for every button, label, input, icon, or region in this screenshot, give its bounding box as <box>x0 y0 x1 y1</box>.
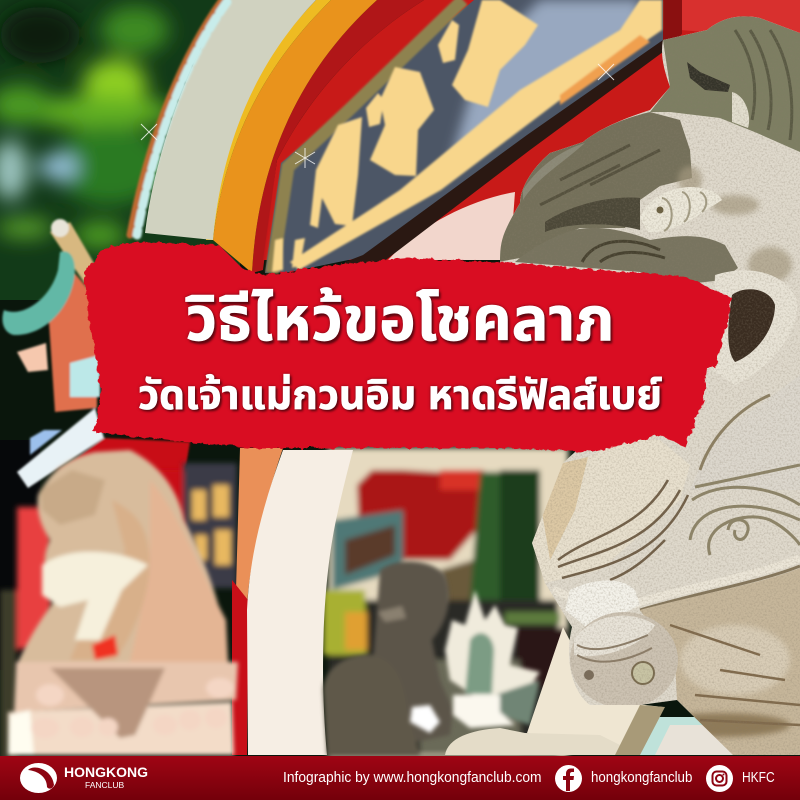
lion lip <box>515 228 738 285</box>
subtitle: วัดเจ้าแม่กวนอิม หาดรีฟัลส์เบย์ <box>138 372 662 418</box>
lion collar band <box>553 558 800 607</box>
lion tooth <box>732 92 749 128</box>
lion neck and shoulder <box>690 375 800 490</box>
lion shoulder fur <box>532 440 690 583</box>
logo wordmark: HONGKONG <box>64 764 148 780</box>
lion lower body <box>640 568 800 760</box>
lion upper nostril <box>687 62 730 92</box>
lion stone base <box>500 16 800 717</box>
lion mouth rim <box>712 270 797 385</box>
instagram handle: HKFC <box>742 769 775 786</box>
ornament strip on arch edge <box>130 0 227 235</box>
lion snout top <box>565 581 640 630</box>
chest scroll pattern <box>690 465 800 555</box>
logo: Hong Kong Fanclub: FANCLUB <box>85 780 124 790</box>
plaque gold characters <box>272 0 662 272</box>
gold-lettered plaque <box>141 0 663 273</box>
title: วิธีไหว้ขอโชคลาภ <box>186 285 614 354</box>
logo: Hong Kong Fanclub <box>20 763 148 793</box>
white dragon ornament <box>410 590 540 733</box>
lion mouth <box>728 289 775 362</box>
large foreground stone lion <box>490 0 800 760</box>
plaque sparkles <box>141 64 614 168</box>
lion stone grain <box>490 0 800 760</box>
lion mane <box>650 16 800 152</box>
footer bar <box>0 756 800 800</box>
left eave roof ornaments <box>2 219 190 488</box>
logo mark <box>20 763 57 793</box>
temple gate arches <box>145 0 800 273</box>
small stone lions, middle <box>323 562 453 755</box>
lower temple background <box>0 448 568 760</box>
icon: instagram <box>706 765 733 792</box>
lion snout ball <box>570 612 678 708</box>
white arch and red column <box>232 448 353 755</box>
lion brow <box>498 112 692 262</box>
lion paw and base behind large lion <box>445 627 735 755</box>
left stone lion and pedestal <box>8 450 238 755</box>
icon: facebook <box>555 765 582 792</box>
shoulder grooves <box>558 480 688 580</box>
lion eye <box>640 187 722 232</box>
lion cheek shading <box>678 166 792 283</box>
facebook handle: hongkongfanclub <box>591 769 692 786</box>
plaque ornamental border <box>272 0 463 273</box>
credit text: Infographic by www.hongkongfanclub.com <box>283 769 542 786</box>
